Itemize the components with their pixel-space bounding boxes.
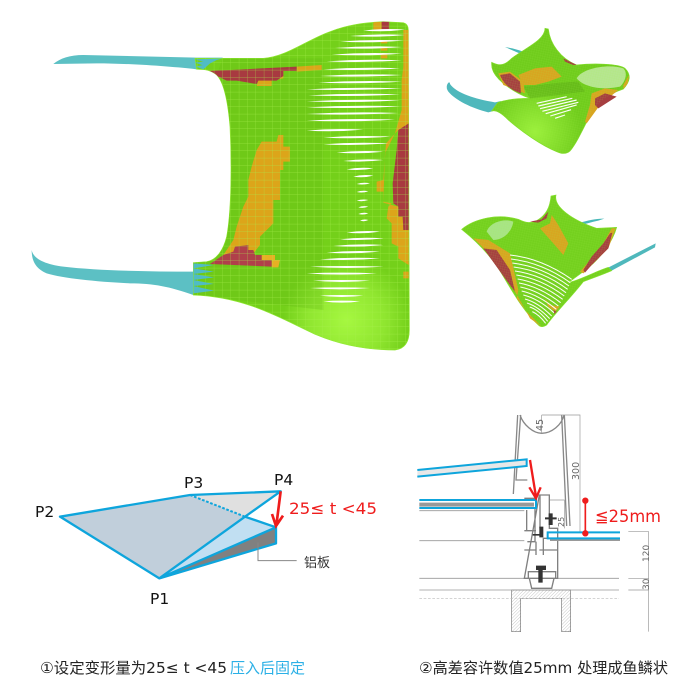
label P4: P4 [274, 471, 293, 489]
aluminium plate face [159, 527, 276, 578]
white slits [510, 255, 572, 323]
pale highlight [487, 220, 513, 240]
orange zone: top [257, 65, 322, 86]
red zones [500, 58, 617, 108]
orange zone: right edge [373, 22, 409, 278]
fine mesh [492, 28, 629, 153]
red arrow [529, 460, 541, 498]
3D view: upper perspective surface [447, 28, 629, 153]
darker inner shading [193, 58, 323, 310]
orange zone: centre [223, 135, 290, 257]
right panel [550, 538, 620, 541]
fin profile [513, 415, 570, 526]
middle panel [419, 503, 534, 507]
right panel outline [548, 532, 620, 538]
support hollow section [512, 590, 571, 632]
main surface: front deformation map [32, 17, 413, 353]
pale slit area [577, 66, 626, 88]
deformation range: 25≤ t <45 [289, 499, 377, 518]
green surface [492, 28, 629, 153]
section drawing [417, 415, 649, 632]
deformation zones [190, 17, 413, 353]
middle panel outline [419, 500, 536, 508]
darker back interior [523, 82, 585, 98]
teal strip: lower left [32, 250, 193, 295]
orange zones [473, 215, 616, 327]
red zones [483, 212, 612, 314]
teal strip: back [555, 219, 604, 229]
red arrow [272, 491, 283, 526]
green surface [462, 195, 617, 327]
orange zones [498, 67, 629, 123]
red dimension [583, 498, 588, 536]
fine mesh [462, 195, 617, 327]
caption 1 blue note: 压入后固定 [230, 660, 305, 677]
white slits [307, 29, 405, 303]
mullion profile [524, 495, 558, 588]
pressed light blue face [159, 517, 276, 578]
red zone: right edge [382, 21, 409, 230]
rear corner face [190, 491, 281, 517]
teal strip: right [607, 243, 656, 271]
upper panel [417, 459, 527, 477]
dimension 300: 300 [571, 462, 582, 480]
dimension 120: 120 [642, 545, 652, 562]
green surface body [193, 22, 409, 350]
teal strip: upper left [53, 55, 223, 69]
main glass face [60, 495, 245, 578]
dimension 25: 25 [557, 517, 566, 527]
red zone: bottom [210, 245, 272, 267]
teal strip: back [505, 47, 552, 65]
fastener bolts [533, 513, 557, 583]
leader line [258, 543, 297, 561]
height tolerance: ≦25mm [595, 507, 661, 526]
structure lines [419, 511, 619, 590]
dashed fold line [190, 495, 245, 517]
label P1: P1 [150, 590, 169, 608]
teal strip: front [447, 82, 501, 112]
caption 1 text: ①设定变形量为25≤ t <45 [40, 659, 227, 677]
panel: mullion section detail [417, 415, 661, 632]
panel geometry [60, 491, 297, 578]
orange zone: bottom [262, 255, 280, 267]
red zone: top [207, 67, 297, 84]
blue outline [60, 491, 281, 578]
label P2: P2 [35, 503, 54, 521]
panel: panel press-in diagram [35, 471, 377, 608]
white slits [537, 97, 578, 118]
caption 2: ②高差容许数值25mm 处理成鱼鳞状 [419, 659, 668, 677]
label aluminium plate: 铝板 [304, 555, 330, 570]
teal mesh transition [193, 58, 223, 293]
dimension 30: 30 [642, 578, 652, 590]
dimension 45: 45 [535, 419, 546, 431]
caption 1 [40, 659, 305, 677]
dashed datum line [419, 597, 619, 599]
3D view: lower perspective surface [462, 195, 656, 327]
label P3: P3 [184, 474, 203, 492]
mesh grid [190, 17, 413, 353]
dimension lines [542, 415, 649, 632]
